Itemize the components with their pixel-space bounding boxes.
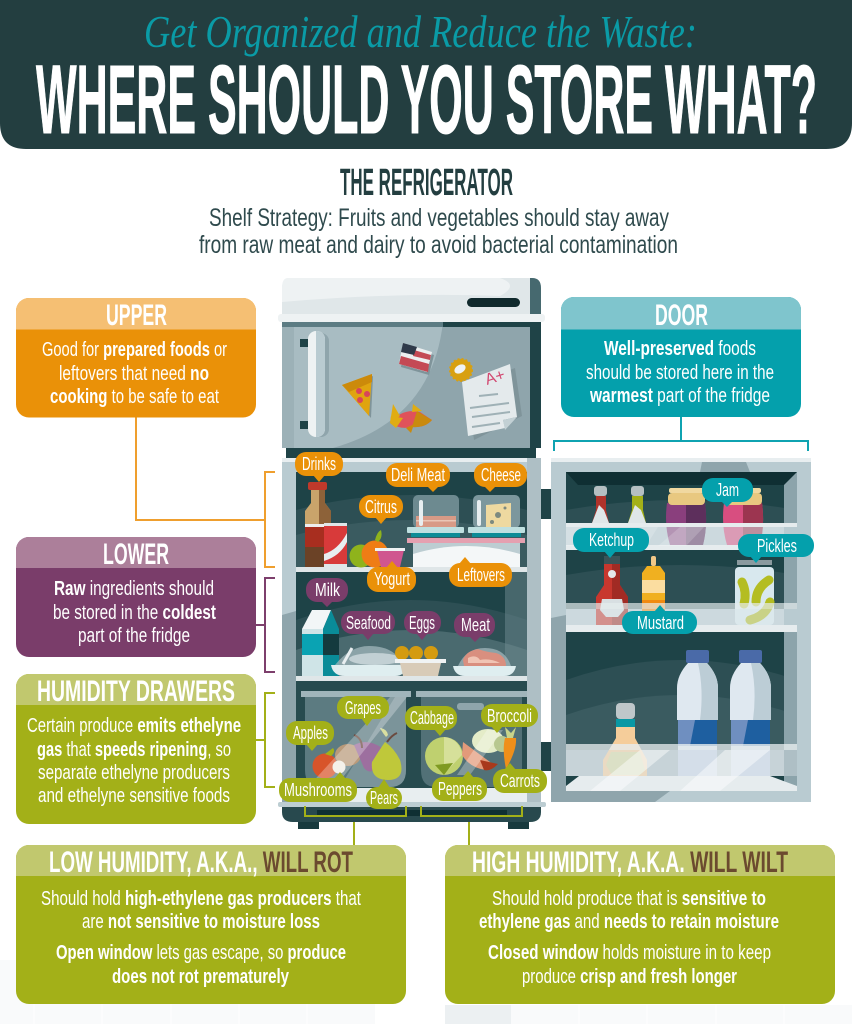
text: lower xyxy=(53,578,216,647)
label: Citrus xyxy=(359,495,403,524)
icon: leftovers container xyxy=(407,538,525,567)
text: low humidity: does not rot prematurely xyxy=(112,966,290,988)
hinge xyxy=(541,489,551,519)
label: Mustard xyxy=(622,605,697,634)
heading: humidity drawers: HUMIDITY DRAWERS xyxy=(37,675,235,708)
lower shelf foods xyxy=(302,610,516,676)
text: humidity drawers: gas that speeds ripening, so xyxy=(37,739,231,761)
icon: broccoli xyxy=(472,729,510,753)
icon: flag magnet xyxy=(399,343,434,375)
panel: door xyxy=(561,297,801,417)
label: Milk xyxy=(306,578,348,607)
label: Peppers: Peppers xyxy=(438,779,482,799)
icon: milk carton xyxy=(302,610,339,676)
text: low humidity: Should hold high-ethylene gas producers that xyxy=(41,888,361,910)
text: lower: Raw ingredients should xyxy=(54,578,214,600)
connector: humidity drawers xyxy=(256,693,275,787)
label: Peppers xyxy=(432,771,487,801)
heading: upper: UPPER xyxy=(106,299,167,332)
label: Citrus: Citrus xyxy=(365,497,397,517)
label: Seafood xyxy=(341,611,395,640)
label: Mustard: Mustard xyxy=(637,613,684,633)
label: Seafood: Seafood xyxy=(346,613,391,633)
label: Jam: Jam xyxy=(716,480,739,500)
text: high humidity: Should hold produce that is sensitive to xyxy=(492,888,766,910)
label: Milk: Milk xyxy=(315,580,341,600)
label: Meat xyxy=(454,613,495,642)
text: low humidity: are not sensitive to moisture loss xyxy=(82,911,320,933)
icon: pickle jar xyxy=(735,560,774,625)
door shelves xyxy=(566,523,797,791)
label: Deli Meat: Deli Meat xyxy=(391,465,445,485)
label: Broccoli xyxy=(481,704,538,733)
hinge xyxy=(541,742,551,771)
shelf strategy text: from raw meat and dairy to avoid bacterial contamination xyxy=(199,231,678,259)
text: upper xyxy=(42,339,227,408)
label: Broccoli: Broccoli xyxy=(487,706,532,726)
refrigerator xyxy=(278,278,811,829)
text: high humidity xyxy=(479,888,779,988)
label: Ketchup xyxy=(573,528,649,558)
heading: low humidity: LOW HUMIDITY, A.K.A., WILL ROT xyxy=(49,846,353,879)
text: door: warmest part of the fridge xyxy=(589,385,770,407)
icon: pizza magnet xyxy=(342,374,373,418)
icon: water bottle xyxy=(730,650,771,783)
label: Cabbage xyxy=(405,706,457,736)
label: Mushrooms: Mushrooms xyxy=(284,780,352,800)
icon: jam jar purple xyxy=(666,488,706,545)
label: Pickles: Pickles xyxy=(757,536,797,556)
label: Pickles xyxy=(738,534,814,563)
upper shelf foods xyxy=(305,482,525,568)
heading: high humidity: HIGH HUMIDITY, A.K.A. WILL WILT xyxy=(472,846,788,879)
icon: citrus xyxy=(350,530,388,568)
heading: door: DOOR xyxy=(655,299,708,332)
text: door: Well-preserved foods xyxy=(604,338,756,360)
icon: can xyxy=(324,523,347,567)
icon: dressing bottle xyxy=(603,703,647,783)
label: Mushrooms xyxy=(279,772,357,802)
text: lower: be stored in the coldest xyxy=(53,602,216,624)
label: Carrots: Carrots xyxy=(500,771,540,791)
header banner xyxy=(0,0,852,154)
connector: upper xyxy=(136,417,275,567)
text: humidity drawers: and ethelyne sensitive foods xyxy=(38,785,230,807)
text: humidity drawers: Certain produce emits ethelyne xyxy=(27,715,241,737)
panel: high humidity xyxy=(445,845,835,1004)
label: Pears: Pears xyxy=(370,788,398,808)
label: Jam xyxy=(702,478,753,507)
icon: peppers xyxy=(462,742,498,770)
icon: cheese container xyxy=(468,495,525,537)
label: Meat: Meat xyxy=(461,615,490,635)
icon: drinks bottle xyxy=(305,482,331,567)
tray bottom xyxy=(296,788,527,802)
icon: door bottle red xyxy=(592,486,609,523)
icon: badge magnet xyxy=(450,359,472,381)
icon: seafood plate xyxy=(331,646,407,676)
icon: mushroom xyxy=(332,744,361,774)
text: upper: Good for prepared foods or xyxy=(42,339,227,361)
text: THE REFRIGERATOR xyxy=(340,162,513,204)
icon: door bottle green xyxy=(628,486,646,523)
label: Apples: Apples xyxy=(293,723,328,743)
label: Leftovers xyxy=(449,557,512,587)
drawer: high humidity xyxy=(416,691,527,787)
fridge base xyxy=(278,802,546,829)
shelf strategy text: Shelf Strategy: Fruits and vegetables should stay away xyxy=(209,204,669,232)
label: Leftovers: Leftovers xyxy=(457,565,505,585)
label: Carrots xyxy=(493,763,547,793)
text: high humidity: produce crisp and fresh longer xyxy=(522,966,737,988)
fridge body xyxy=(282,458,541,802)
icon: jam jar pink xyxy=(723,488,763,545)
panel: humidity drawers xyxy=(16,674,256,824)
icon: mustard bottle xyxy=(642,556,665,612)
text: high humidity: ethylene gas and needs to retain moisture xyxy=(479,911,779,933)
label: Drinks: Drinks xyxy=(302,454,336,474)
connector: humidity bracket high xyxy=(468,816,470,846)
panel: lower xyxy=(16,537,256,657)
text: upper: leftovers that need no xyxy=(59,363,209,385)
text: low humidity: Open window lets gas escape, so produce xyxy=(56,942,346,964)
text: high humidity: Closed window holds moisture in to keep xyxy=(488,942,771,964)
icon: fish magnet xyxy=(390,404,432,433)
label: Eggs: Eggs xyxy=(409,613,435,633)
shelf strategy text xyxy=(199,204,678,259)
label: Eggs xyxy=(404,611,441,640)
panel: upper xyxy=(16,298,256,418)
label: Yogurt: Yogurt xyxy=(374,569,410,589)
label: Grapes: Grapes xyxy=(345,698,381,718)
icon: apple xyxy=(312,748,338,778)
humidity drawers xyxy=(296,691,527,802)
connector: lower xyxy=(256,578,275,672)
label: Cheese: Cheese xyxy=(481,465,521,485)
freezer handle xyxy=(300,331,329,437)
icon: deli meat container xyxy=(407,495,464,537)
text: lower: part of the fridge xyxy=(78,625,190,647)
heading: lower: LOWER xyxy=(103,538,169,571)
shelf xyxy=(296,676,527,681)
icon: yogurt xyxy=(375,548,405,567)
icon: paper with A+: A+ xyxy=(483,366,507,389)
icon: paper with A+ xyxy=(462,364,522,440)
icon: cabbage xyxy=(425,737,463,775)
text: humidity drawers: separate ethelyne producers xyxy=(38,762,230,784)
text: humidity drawers xyxy=(27,715,241,807)
label: Pears xyxy=(366,779,402,809)
icon: meat plate xyxy=(453,648,516,676)
label: Cheese xyxy=(474,463,527,492)
door bin fronts xyxy=(566,527,784,776)
label: Grapes xyxy=(337,696,389,726)
connector: door bracket xyxy=(554,417,808,451)
label: Cabbage: Cabbage xyxy=(410,708,454,728)
label: Ketchup: Ketchup xyxy=(589,530,634,550)
label: Drinks xyxy=(295,452,343,482)
icon: ketchup bottle xyxy=(596,556,628,625)
freezer door xyxy=(278,278,545,458)
text: upper: cooking to be safe to eat xyxy=(50,386,219,408)
label: Deli Meat xyxy=(386,463,450,492)
refrigerator door xyxy=(551,458,811,802)
subtitle: Get Organized and Reduce the Waste: xyxy=(144,6,697,57)
label: Apples xyxy=(286,721,334,751)
icon: carrots xyxy=(504,727,516,769)
shelf xyxy=(296,567,527,572)
text: low humidity xyxy=(41,888,361,988)
label: Yogurt xyxy=(367,561,416,592)
icon: eggs carton xyxy=(395,646,446,676)
drawer bracket ticks xyxy=(305,806,522,816)
icon: grapes xyxy=(354,735,382,772)
drawer: low humidity xyxy=(301,691,411,787)
icon: water bottle xyxy=(677,650,718,783)
text: door xyxy=(586,338,774,407)
icon: pear xyxy=(372,728,402,780)
panel: low humidity xyxy=(16,845,406,1004)
connector: humidity bracket low xyxy=(353,816,355,846)
text: door: should be stored here in the xyxy=(586,362,774,384)
